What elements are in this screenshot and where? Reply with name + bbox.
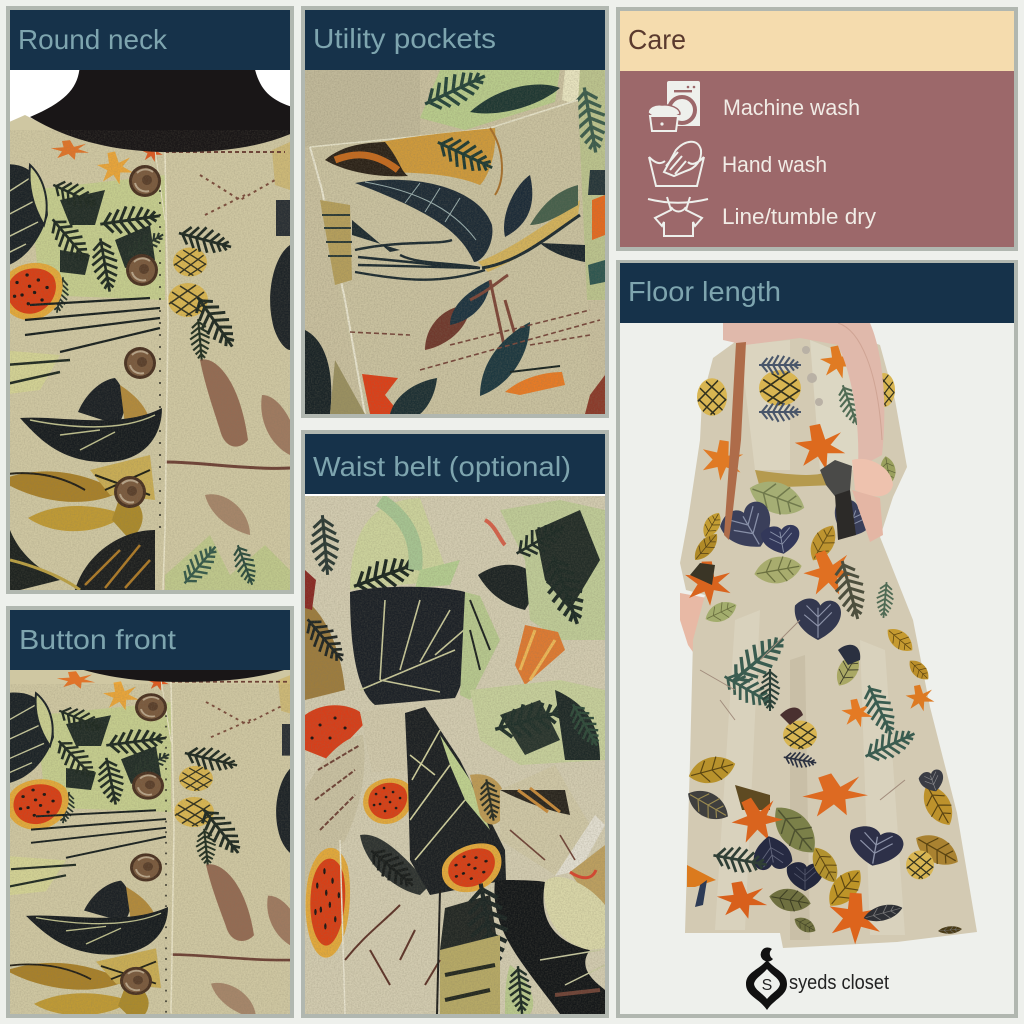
photo: button front close-up	[10, 670, 290, 1014]
heading: care: Care	[628, 24, 686, 55]
text: machine wash: Machine wash	[723, 95, 860, 120]
panel: care	[616, 7, 1018, 251]
text: line dry: Line/tumble dry	[722, 204, 876, 229]
heading: button front: Button front	[19, 624, 176, 655]
panel: floor length	[616, 260, 1018, 1018]
heading: button front	[10, 610, 290, 670]
heading: care	[620, 11, 1014, 71]
heading: floor length	[620, 263, 1014, 323]
photo: waist belt tie close-up	[298, 496, 607, 1015]
heading: utility pockets	[305, 10, 605, 70]
photo: round neck close-up with buttons	[0, 60, 295, 591]
panel: round neck	[0, 6, 295, 594]
photo: pocket close-up	[305, 62, 611, 414]
text: hand wash: Hand wash	[722, 152, 827, 177]
logo: syeds closet: S	[762, 977, 772, 994]
heading: floor length: Floor length	[628, 276, 781, 307]
icon: line dry	[648, 197, 708, 236]
icon: hand wash	[649, 142, 704, 186]
panel: waist belt	[298, 430, 609, 1018]
heading: waist belt	[305, 434, 605, 494]
heading: utility pockets: Utility pockets	[313, 23, 496, 54]
photo: full-length floral dress on model	[680, 323, 977, 950]
panel: utility pockets	[301, 6, 611, 418]
icon: machine wash	[648, 81, 700, 131]
panel: button front	[6, 601, 301, 1023]
logo: syeds closet: syeds closet	[789, 972, 889, 994]
logo: syeds closet	[746, 947, 889, 1010]
heading: waist belt: Waist belt (optional)	[313, 451, 571, 482]
heading: round neck	[10, 10, 290, 70]
heading: round neck: Round neck	[18, 24, 168, 55]
